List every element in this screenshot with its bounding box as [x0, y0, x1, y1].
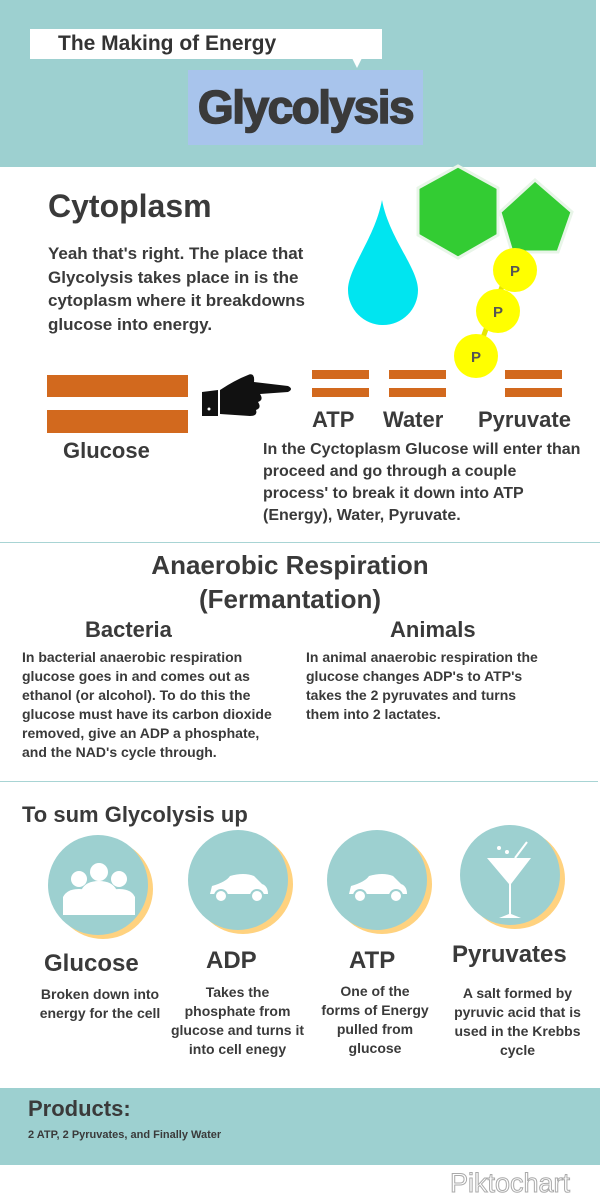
icon: glucose molecule: P	[493, 304, 503, 321]
text: process description: In the Cyctoplasm Glucose will enter than	[263, 441, 580, 458]
footer: products: Products:	[28, 1096, 131, 1121]
item: Pyruvates	[452, 825, 581, 1058]
heading: Anaerobic Respiration: (Fermantation)	[199, 584, 381, 614]
panel: bacteria: Bacteria	[85, 617, 172, 642]
item: Glucose: energy for the cell	[40, 1005, 160, 1021]
text: cytoplasm intro: glucose into energy.	[48, 314, 212, 334]
panel: bacteria: and the NAD's cycle through.	[22, 744, 217, 760]
label: Glucose: Glucose	[63, 438, 150, 463]
item: Glucose: Glucose	[44, 950, 139, 977]
labels: ATP Water Pyruvate	[312, 407, 571, 432]
item: ATP	[321, 830, 432, 1056]
panel: bacteria: glucose goes in and comes out as	[22, 668, 250, 684]
panel: animals: glucose changes ADP's to ATP's	[306, 668, 522, 684]
text: process description: proceed and go through a couple	[263, 463, 516, 480]
panel: bacteria	[22, 617, 272, 760]
icon: pointing hand	[202, 374, 291, 416]
item: ADP: ADP	[206, 947, 257, 974]
subtitle box	[30, 29, 382, 59]
item: Pyruvates: used in the Krebbs	[454, 1023, 581, 1039]
labels: ATP Water Pyruvate: ATP	[312, 407, 354, 432]
heading: Cytoplasm: Cytoplasm	[48, 188, 212, 224]
panel: bacteria: ethanol (or alcohol). To do this the	[22, 687, 250, 703]
title: Glycolysis: Glycolysis	[198, 81, 413, 133]
product bars	[312, 370, 562, 397]
item: ADP: into cell enegy	[189, 1041, 286, 1057]
text: cytoplasm intro: Glycolysis takes place in is the	[48, 268, 298, 286]
icon: glucose molecule	[416, 164, 574, 378]
item: ADP: phosphate from	[185, 1003, 290, 1019]
item: ATP: forms of Energy	[321, 1002, 429, 1018]
item: ADP	[171, 830, 304, 1057]
text: cytoplasm intro	[48, 244, 305, 334]
item: Glucose	[40, 835, 160, 1021]
panel: animals: them into 2 lactates.	[306, 706, 441, 722]
panel: bacteria: In bacterial anaerobic respiration	[22, 649, 242, 665]
logo: Piktochart: Piktochart	[450, 1168, 570, 1198]
text: process description: (Energy), Water, Pyruvate.	[263, 507, 461, 524]
text: cytoplasm intro: cytoplasm where it breakdowns	[48, 291, 305, 310]
item: Pyruvates: cycle	[500, 1042, 535, 1058]
item: Pyruvates: Pyruvates	[452, 941, 567, 968]
item: ATP: ATP	[349, 947, 395, 974]
item: ADP: glucose and turns it	[171, 1022, 304, 1038]
icon: water drop	[348, 200, 418, 325]
footer: products: 2 ATP, 2 Pyruvates, and Finally Water	[28, 1129, 221, 1141]
labels: ATP Water Pyruvate: Pyruvate	[478, 407, 571, 432]
panel: bacteria: removed, give an ADP a phosphate,	[22, 725, 259, 741]
text: process description: process' to break it down into ATP	[263, 485, 524, 502]
item: Pyruvates: A salt formed by	[463, 985, 572, 1001]
item: ATP: glucose	[349, 1040, 401, 1056]
heading: To sum Glycolysis up: To sum Glycolysis up	[22, 802, 248, 827]
header band	[0, 0, 596, 167]
panel: animals: Animals	[390, 617, 476, 642]
item: ADP: Takes the	[206, 984, 269, 1000]
subtitle box: The Making of Energy	[58, 32, 276, 55]
footer: products	[0, 1088, 600, 1165]
text: process description	[263, 441, 580, 524]
panel: animals: takes the 2 pyruvates and turns	[306, 687, 516, 703]
speech tail	[352, 58, 362, 68]
heading: Anaerobic Respiration: Anaerobic Respiration	[151, 550, 429, 580]
title: Glycolysis	[188, 70, 423, 145]
icon: glucose molecule: P	[510, 263, 520, 280]
labels: ATP Water Pyruvate: Water	[383, 407, 443, 432]
text: cytoplasm intro: Yeah that's right. The place that	[48, 244, 303, 263]
glucose bars	[47, 375, 188, 433]
item: ATP: pulled from	[337, 1021, 413, 1037]
panel: animals: In animal anaerobic respiration the	[306, 649, 538, 665]
heading: Anaerobic Respiration	[151, 550, 429, 614]
item: Pyruvates: pyruvic acid that is	[454, 1004, 581, 1020]
item: ATP: One of the	[340, 983, 410, 999]
panel: animals	[306, 617, 538, 722]
panel: bacteria: glucose must have its carbon dioxide	[22, 706, 272, 722]
icon: glucose molecule: P	[471, 349, 481, 366]
item: Glucose: Broken down into	[41, 986, 159, 1002]
